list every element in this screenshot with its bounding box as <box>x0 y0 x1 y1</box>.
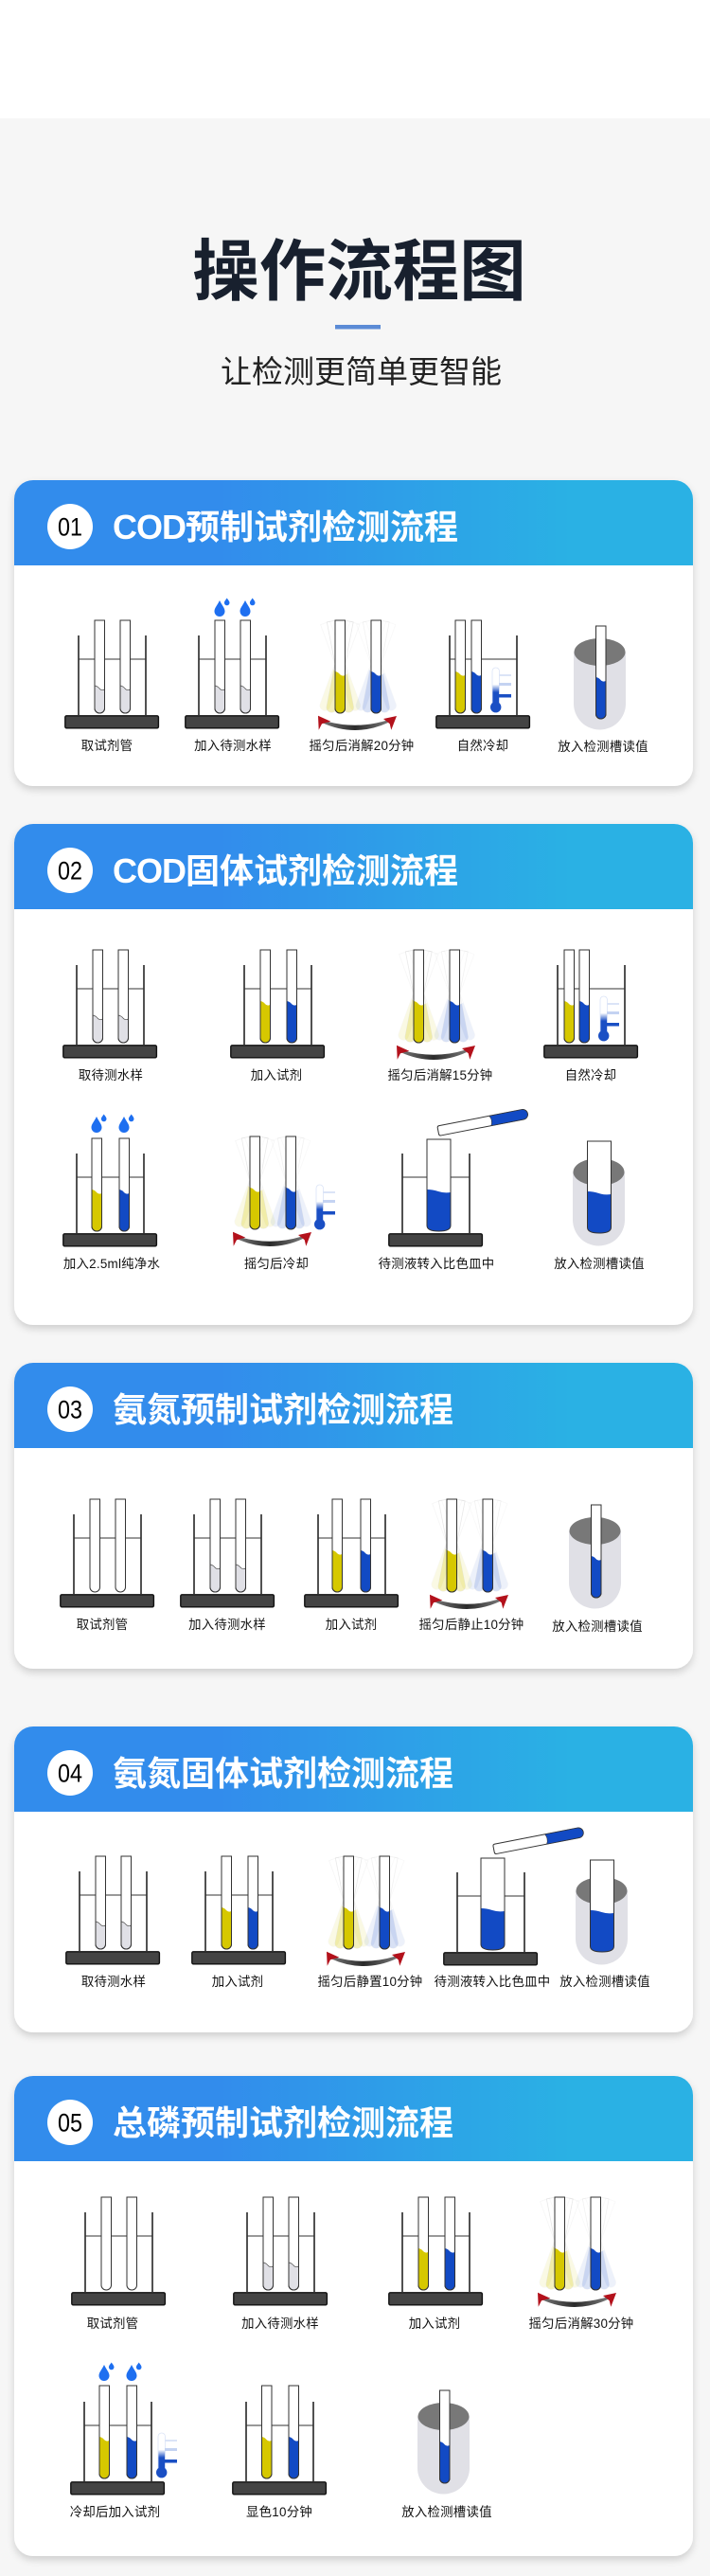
step 1-5 放入检测槽读值: 放入检测槽读值 <box>558 740 648 754</box>
step 3-1 取试剂管: 取试剂管 <box>77 1618 128 1632</box>
subtitle: 让检测更简单更智能 <box>221 354 502 389</box>
step 2-5 加入2.5ml纯净水 <box>63 1114 160 1271</box>
step 3-3 加入试剂: 加入试剂 <box>326 1618 377 1632</box>
step 4-2 加入试剂 <box>192 1856 285 1989</box>
panel header 05: 05 <box>58 2108 82 2137</box>
step 2-8 放入检测槽读值 <box>554 1141 645 1271</box>
panel: 01 COD预制试剂检测流程 <box>14 480 693 786</box>
step 3-3 加入试剂 <box>305 1499 398 1632</box>
step 1-5 放入检测槽读值 <box>558 626 648 754</box>
step 5-5 冷却后加入试剂: 冷却后加入试剂 <box>70 2505 160 2519</box>
step 4-4 待测液转入比色皿中: 待测液转入比色皿中 <box>435 1974 550 1989</box>
step 2-3 摇匀后消解15分钟 <box>388 950 492 1082</box>
step 3-4 摇匀后静止10分钟: 摇匀后静止10分钟 <box>419 1617 524 1632</box>
step 5-4 摇匀后消解30分钟: 摇匀后消解30分钟 <box>529 2316 633 2331</box>
panel header 03: 氨氮预制试剂检测流程 <box>113 1390 453 1429</box>
step 1-4 自然冷却 <box>436 620 529 753</box>
step 5-6 显色10分钟: 显色10分钟 <box>246 2504 312 2519</box>
step 5-3 加入试剂: 加入试剂 <box>409 2317 460 2331</box>
step 2-4 自然冷却 <box>544 950 637 1082</box>
step 2-6 摇匀后冷却 <box>233 1136 335 1271</box>
step 1-3 摇匀后消解20分钟: 摇匀后消解20分钟 <box>310 738 414 753</box>
panel: 05 总磷预制试剂检测流程 <box>14 2076 693 2556</box>
panel: 04 氨氮固体试剂检测流程 <box>14 1726 693 2032</box>
step 4-4 待测液转入比色皿中 <box>435 1827 584 1989</box>
step 3-5 放入检测槽读值: 放入检测槽读值 <box>552 1619 643 1634</box>
panel header 03 <box>14 1363 693 1448</box>
step 3-2 加入待测水样 <box>181 1499 274 1632</box>
panel header 01: COD预制试剂检测流程 <box>113 508 458 546</box>
step 4-3 摇匀后静置10分钟 <box>318 1856 422 1989</box>
step 2-5 加入2.5ml纯净水: 加入2.5ml纯净水 <box>63 1257 160 1271</box>
panel header 04: 氨氮固体试剂检测流程 <box>113 1754 453 1793</box>
step 5-3 加入试剂 <box>389 2197 482 2331</box>
step 5-7 放入检测槽读值 <box>401 2390 492 2519</box>
panel header 02 <box>14 824 693 909</box>
panel header 05: 总磷预制试剂检测流程 <box>113 2103 453 2142</box>
step 1-1 取试剂管: 取试剂管 <box>81 739 133 753</box>
step 2-7 待测液转入比色皿中 <box>379 1109 528 1271</box>
step 2-7 待测液转入比色皿中: 待测液转入比色皿中 <box>379 1256 494 1271</box>
step 5-7 放入检测槽读值: 放入检测槽读值 <box>401 2505 492 2519</box>
step 3-2 加入待测水样: 加入待测水样 <box>188 1618 266 1632</box>
panel header 04: 04 <box>58 1760 82 1788</box>
step 2-1 取待测水样: 取待测水样 <box>79 1068 143 1082</box>
panel header 04 <box>14 1726 693 1812</box>
title: 操作流程图 <box>192 234 526 309</box>
panel header 02: COD固体试剂检测流程 <box>113 851 458 890</box>
panel: 03 氨氮预制试剂检测流程 <box>14 1363 693 1669</box>
title accent bar <box>335 325 381 330</box>
step 2-3 摇匀后消解15分钟: 摇匀后消解15分钟 <box>388 1067 492 1082</box>
step 5-2 加入待测水样: 加入待测水样 <box>241 2317 319 2331</box>
step 5-1 取试剂管: 取试剂管 <box>87 2317 138 2331</box>
step 1-2 加入待测水样: 加入待测水样 <box>194 739 272 753</box>
step 2-8 放入检测槽读值: 放入检测槽读值 <box>554 1257 645 1271</box>
step 4-1 取待测水样: 取待测水样 <box>81 1975 146 1989</box>
step 1-2 加入待测水样 <box>186 599 278 753</box>
step 2-2 加入试剂: 加入试剂 <box>251 1068 302 1082</box>
step 4-2 加入试剂: 加入试剂 <box>212 1975 263 1989</box>
step 5-4 摇匀后消解30分钟 <box>529 2197 633 2331</box>
panel: 02 COD固体试剂检测流程 <box>14 824 693 1325</box>
step 2-6 摇匀后冷却: 摇匀后冷却 <box>244 1257 309 1271</box>
panel header 05 <box>14 2076 693 2161</box>
step 1-1 取试剂管 <box>65 620 158 753</box>
step 2-4 自然冷却: 自然冷却 <box>565 1067 616 1082</box>
step 3-5 放入检测槽读值 <box>552 1505 643 1634</box>
step 2-2 加入试剂 <box>231 950 324 1082</box>
panel header 01 <box>14 480 693 565</box>
step 1-3 摇匀后消解20分钟 <box>310 620 414 753</box>
step 5-2 加入待测水样 <box>234 2197 327 2331</box>
step 1-4 自然冷却: 自然冷却 <box>457 738 508 753</box>
step 2-1 取待测水样 <box>63 950 156 1082</box>
step 4-5 放入检测槽读值: 放入检测槽读值 <box>559 1975 650 1989</box>
panel header 03: 03 <box>58 1396 82 1424</box>
step 5-1 取试剂管 <box>72 2197 165 2331</box>
panel header 01: 01 <box>58 513 82 542</box>
step 3-4 摇匀后静止10分钟 <box>419 1499 524 1632</box>
step 4-3 摇匀后静置10分钟: 摇匀后静置10分钟 <box>318 1974 422 1989</box>
panel header 02: 02 <box>58 856 82 885</box>
step 4-5 放入检测槽读值 <box>559 1860 650 1989</box>
step 3-1 取试剂管 <box>61 1499 153 1632</box>
step 4-1 取待测水样 <box>66 1856 159 1989</box>
step 5-5 冷却后加入试剂 <box>70 2362 177 2519</box>
step 5-6 显色10分钟 <box>233 2386 326 2519</box>
